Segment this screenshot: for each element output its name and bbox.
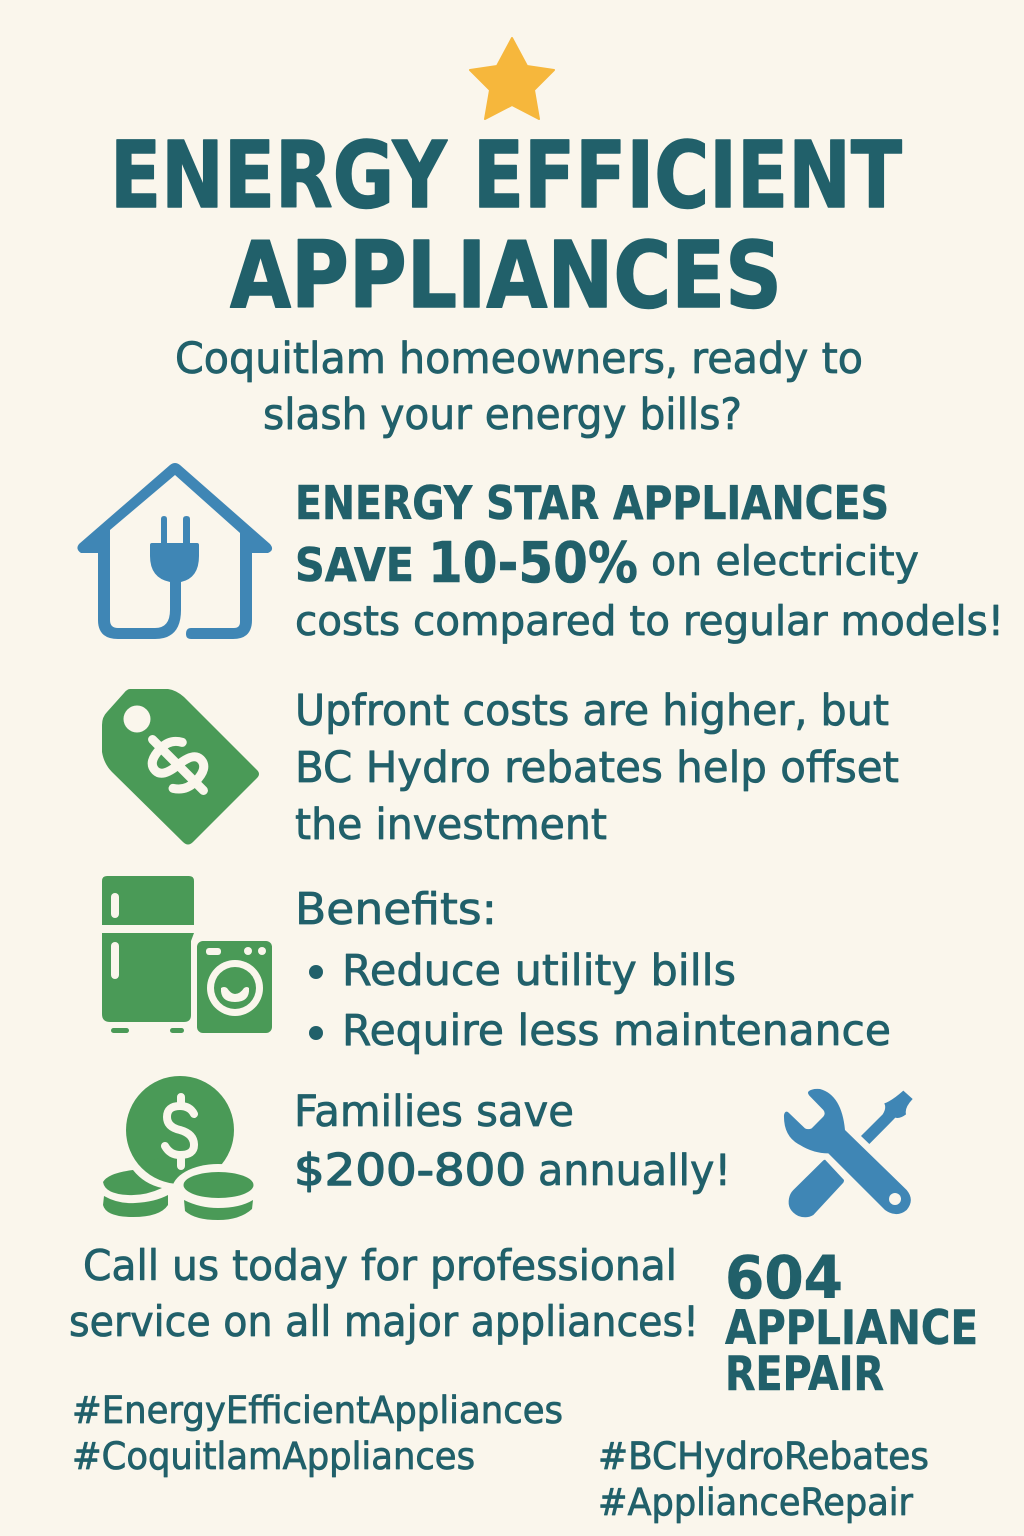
text: upfront costs: BC Hydro rebates help offset — [295, 743, 899, 793]
title — [110, 122, 902, 329]
text: upfront costs: Upfront costs are higher, but — [295, 686, 889, 736]
logo: 604 appliance repair: APPLIANCE — [725, 1301, 978, 1356]
text: benefits list — [295, 884, 891, 1056]
text: family savings: Families save — [294, 1087, 574, 1137]
icon: price tag — [102, 689, 259, 844]
text: upfront costs: the investment — [295, 800, 607, 850]
icon: coins — [103, 1076, 264, 1220]
icon: star — [470, 38, 554, 119]
logo: 604 appliance repair: REPAIR — [725, 1347, 884, 1402]
text: energy star savings — [295, 476, 1004, 645]
hashtags: #BCHydroRebates — [598, 1435, 929, 1478]
text: call to action: service on all major appliances! — [69, 1297, 699, 1346]
text: benefits list: Benefits: — [295, 884, 497, 935]
icon: house with plug — [77, 463, 272, 639]
title: APPLIANCES — [230, 222, 782, 329]
subtitle: slash your energy bills? — [263, 390, 742, 440]
hashtags: #EnergyEfficientAppliances — [72, 1389, 563, 1432]
text: family savings: $200-800 — [294, 1145, 526, 1196]
text: energy star savings: 10-50% — [428, 531, 638, 596]
hashtags — [72, 1389, 929, 1524]
text: energy star savings: ENERGY STAR APPLIANCES — [295, 476, 889, 530]
text: family savings: annually! — [538, 1146, 731, 1196]
hashtags: #ApplianceRepair — [598, 1481, 914, 1524]
text: family savings — [294, 1087, 731, 1196]
icon: wrench and screwdriver — [784, 1089, 913, 1217]
icon: fridge and washer — [102, 876, 272, 1033]
text: energy star savings: on electricity — [651, 537, 919, 585]
text: energy star savings: SAVE — [295, 538, 414, 592]
text: benefits list: Reduce utility bills — [342, 946, 736, 996]
text: call to action — [69, 1241, 699, 1346]
logo: 604 appliance repair — [725, 1243, 978, 1402]
subtitle — [175, 334, 863, 440]
text: benefits list: Require less maintenance — [342, 1006, 891, 1056]
text: upfront costs — [295, 686, 899, 850]
subtitle: Coquitlam homeowners, ready to — [175, 334, 863, 384]
text: call to action: Call us today for professional — [83, 1241, 677, 1290]
text: energy star savings: costs compared to regular models! — [295, 597, 1004, 645]
logo: 604 appliance repair: 604 — [725, 1243, 843, 1312]
hashtags: #CoquitlamAppliances — [72, 1435, 475, 1478]
